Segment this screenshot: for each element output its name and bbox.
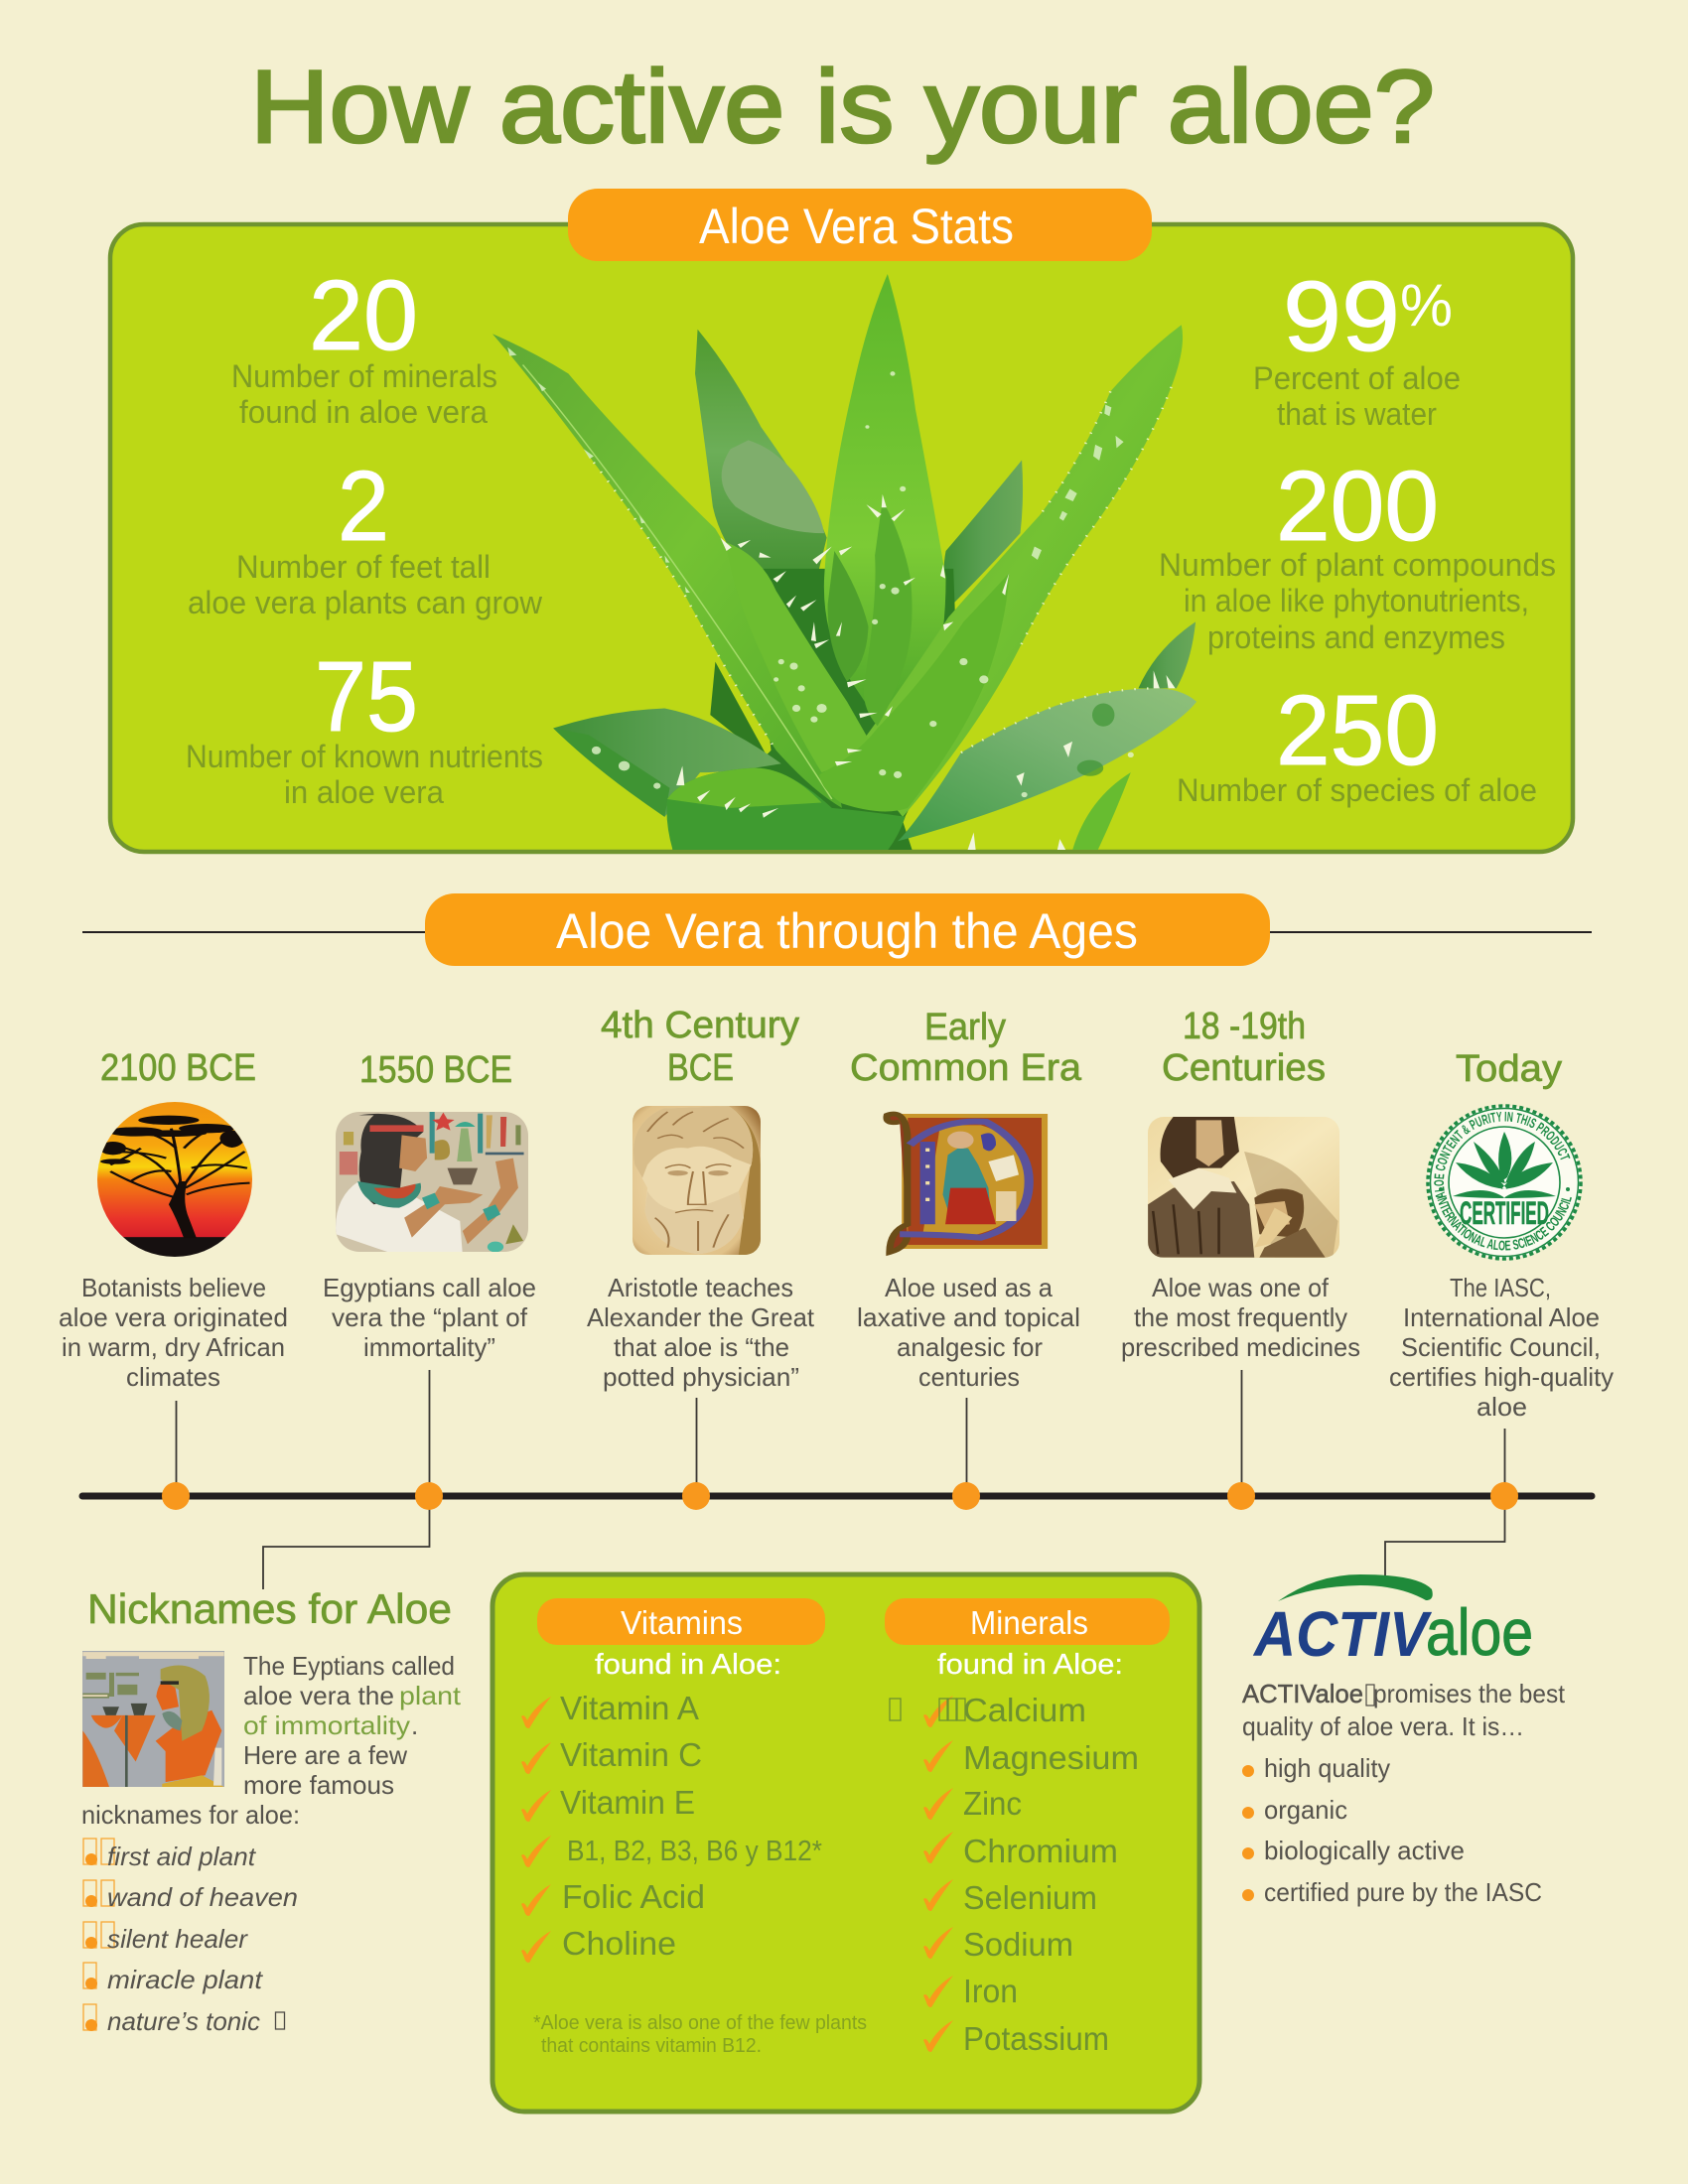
bullet list: certified pure by the IASC <box>1264 1877 1542 1907</box>
stat: 99% water <box>1253 261 1461 432</box>
intro text: of immortality <box>243 1710 410 1740</box>
nickname list: miracle plant <box>107 1965 264 1994</box>
stat: 75 nutrients <box>186 641 543 810</box>
heading: 2100 BCE: 2100 BCE <box>100 1047 256 1089</box>
icon: IASC certified seal: ALOE CONTENT & PURITY IN THIS PRODUCT <box>1434 1112 1571 1197</box>
icon: IASC certified seal <box>1426 1104 1583 1261</box>
era: 2100 BCE <box>59 1047 288 1392</box>
description <box>1121 1273 1360 1362</box>
missing glyph boxes <box>890 1699 965 1720</box>
stat: 99% water: that is water <box>1277 396 1437 432</box>
heading: 4th Century BCE <box>601 1005 799 1089</box>
description: Aloe used as a <box>885 1273 1054 1302</box>
nickname list: wand of heaven <box>107 1882 298 1912</box>
heading: Today: Today <box>1456 1048 1562 1090</box>
mineral list: Magnesium <box>963 1739 1139 1776</box>
intro text: more famous <box>243 1770 394 1800</box>
intro text <box>1242 1679 1566 1741</box>
description: aloe <box>1477 1392 1527 1422</box>
stat: 200 plant compounds: 200 <box>1276 451 1439 562</box>
stat: 99% water: % <box>1400 272 1453 339</box>
era: Early Common Era <box>850 1007 1082 1392</box>
stat: 2 feet tall: aloe vera plants can grow <box>188 585 543 620</box>
nickname bullet markers <box>83 1839 284 2031</box>
description: potted physician” <box>603 1362 799 1392</box>
stat: 20 minerals: found in aloe vera <box>239 394 488 430</box>
vitamin list: Vitamin A <box>560 1690 699 1726</box>
stat: 75 nutrients: Number of known nutrients <box>186 739 543 774</box>
intro text: . <box>411 1710 418 1740</box>
stat: 250 species: 250 <box>1276 675 1439 786</box>
stat: 20 minerals <box>231 260 497 430</box>
description: Alexander the Great <box>587 1302 815 1332</box>
description: Aloe was one of <box>1152 1273 1330 1302</box>
panel: ACTIValoe <box>1242 1574 1566 1907</box>
description <box>59 1273 288 1392</box>
stat: 200 plant compounds <box>1159 451 1556 655</box>
heading: Early Common Era <box>850 1007 1082 1089</box>
stat: 99% water: 99 <box>1283 261 1400 372</box>
column: vitamins <box>521 1598 867 2057</box>
footnote: that contains vitamin B12. <box>541 2035 762 2057</box>
title: How active is your aloe? <box>250 50 1435 165</box>
image: aloe vera plant <box>492 274 1196 857</box>
icon: IASC certified seal: CERTIFIED <box>1460 1195 1549 1231</box>
stat: 250 species <box>1177 675 1537 808</box>
description: that aloe is “the <box>614 1332 789 1362</box>
panel: aloe vera stats <box>110 189 1573 857</box>
stat: 250 species: Number of species of aloe <box>1177 772 1537 808</box>
era: Today <box>1389 1048 1614 1422</box>
description: vera the “plant of <box>332 1302 528 1332</box>
description: Scientific Council, <box>1401 1332 1601 1362</box>
filler <box>669 569 958 853</box>
timeline with connectors and dots <box>82 1370 1592 1589</box>
nickname list: first aid plant <box>107 1842 257 1871</box>
vitamin list: B1, B2, B3, B6 y B12* <box>567 1836 822 1867</box>
icon: IASC certified seal: INTERNATIONAL ALOE SCIENCE COUNCIL <box>1437 1195 1572 1251</box>
stat: 200 plant compounds: proteins and enzymes <box>1207 619 1505 655</box>
heading: 18-19th Centuries: 18 -19th <box>1183 1006 1306 1047</box>
heading: 18-19th Centuries: Centuries <box>1162 1047 1326 1089</box>
vitamin list: Choline <box>562 1925 676 1962</box>
image: Egyptian relief <box>336 1112 528 1254</box>
description: certifies high-quality <box>1389 1362 1614 1392</box>
check marks <box>923 1696 953 2052</box>
intro text <box>81 1651 462 1830</box>
intro text: aloe vera the <box>243 1681 394 1710</box>
logo: ACTIValoe: ACTIV <box>1252 1598 1433 1670</box>
intro text: promises the best <box>1373 1679 1566 1708</box>
image: acacia tree at sunset <box>97 1102 252 1257</box>
image: pharaoh wall painting <box>82 1651 224 1787</box>
stat: 2 feet tall: 2 <box>338 451 389 562</box>
description: Egyptians call aloe <box>323 1273 536 1302</box>
panel: vitamins and minerals <box>492 1574 1199 2112</box>
heading: 4th Century BCE: 4th Century <box>601 1005 799 1046</box>
heading: 4th Century BCE: BCE <box>667 1047 734 1089</box>
nickname list: nature’s tonic <box>107 2006 260 2036</box>
bullet list <box>1242 1753 1542 1907</box>
panel: nicknames for aloe <box>81 1585 462 2036</box>
mineral list: Zinc <box>963 1785 1022 1822</box>
nickname list <box>107 1842 298 2036</box>
section header: Aloe Vera through the Ages: Aloe Vera through the Ages <box>556 903 1138 959</box>
mineral list <box>963 1692 1139 2057</box>
stat: 2 feet tall <box>188 451 543 620</box>
subheading: found in Aloe: <box>595 1649 781 1681</box>
footnote: *Aloe vera is also one of the few plants <box>533 2012 867 2034</box>
heading pill: Aloe Vera Stats <box>568 189 1152 261</box>
column: minerals <box>885 1598 1170 2057</box>
description: in warm, dry African <box>62 1332 285 1362</box>
nickname list: silent healer <box>107 1924 248 1954</box>
description <box>1389 1273 1614 1422</box>
logo: ACTIValoe <box>1252 1574 1533 1670</box>
image: bust of Aristotle <box>633 1106 761 1255</box>
stat: 2 feet tall: Number of feet tall <box>236 549 491 585</box>
description: climates <box>126 1362 220 1392</box>
intro text: The Eyptians called <box>243 1651 455 1681</box>
description: immortality” <box>363 1332 495 1362</box>
image: illuminated letter D <box>887 1114 1045 1253</box>
description: The IASC, <box>1450 1273 1551 1302</box>
intro text: nicknames for aloe: <box>81 1800 300 1830</box>
stat: 75 nutrients: 75 <box>315 641 418 752</box>
stat: 200 plant compounds: in aloe like phytonutrients, <box>1184 583 1529 618</box>
mineral list: Iron <box>963 1973 1018 2009</box>
vitamin list: Vitamin E <box>560 1784 695 1821</box>
era: 18-19th Centuries <box>1121 1006 1360 1362</box>
mineral list: Potassium <box>963 2020 1109 2057</box>
vitamin list: Folic Acid <box>562 1878 705 1915</box>
intro text: ACTIValoe <box>1242 1679 1363 1708</box>
mineral list: Calcium <box>963 1692 1086 1728</box>
pill: Vitamins: Vitamins <box>621 1604 743 1641</box>
bullet list: biologically active <box>1264 1836 1465 1865</box>
vitamin list <box>560 1690 822 1962</box>
stat: 99% water: Percent of aloe <box>1253 360 1461 396</box>
logo: ACTIValoe: aloe <box>1426 1595 1533 1669</box>
description: Botanists believe <box>81 1273 266 1302</box>
check marks <box>521 1697 551 1963</box>
pill: Minerals <box>885 1598 1170 1645</box>
mineral list: Sodium <box>963 1926 1073 1963</box>
footnote <box>533 2012 867 2057</box>
heading pill: Aloe Vera Stats: Aloe Vera Stats <box>699 199 1014 254</box>
description: centuries <box>918 1362 1020 1392</box>
description: analgesic for <box>897 1332 1043 1362</box>
description <box>323 1273 536 1362</box>
bullet list: organic <box>1264 1795 1347 1825</box>
description: prescribed medicines <box>1121 1332 1360 1362</box>
bullet list: high quality <box>1264 1753 1390 1783</box>
stat: 200 plant compounds: Number of plant compounds <box>1159 547 1556 583</box>
pill: Minerals: Minerals <box>970 1604 1088 1641</box>
mineral list: Chromium <box>963 1833 1118 1869</box>
section header: Aloe Vera through the Ages <box>82 893 1592 966</box>
heading: 1550 BCE: 1550 BCE <box>359 1049 512 1091</box>
description: aloe vera originated <box>59 1302 288 1332</box>
heading: 18-19th Centuries <box>1162 1006 1326 1089</box>
vitamin list: Vitamin C <box>560 1736 702 1773</box>
heading: Nicknames for Aloe: Nicknames for Aloe <box>87 1585 452 1632</box>
description: International Aloe <box>1403 1302 1600 1332</box>
description: laxative and topical <box>857 1302 1080 1332</box>
subheading: found in Aloe: <box>937 1649 1123 1681</box>
stat: 20 minerals: 20 <box>309 260 418 371</box>
mineral list: Selenium <box>963 1879 1097 1916</box>
era: 1550 BCE <box>323 1049 536 1362</box>
stat: 75 nutrients: in aloe vera <box>284 774 444 810</box>
image: engraving of physician and boy <box>1148 1117 1339 1258</box>
era: 4th Century BCE <box>587 1005 815 1392</box>
heading: Early Common Era: Early <box>924 1007 1006 1048</box>
stat: 20 minerals: Number of minerals <box>231 358 497 394</box>
intro text: plant <box>399 1681 462 1710</box>
description: the most frequently <box>1134 1302 1347 1332</box>
heading: Early Common Era: Common Era <box>850 1047 1082 1089</box>
pill: Vitamins <box>537 1598 825 1645</box>
intro text: Here are a few <box>243 1740 407 1770</box>
description: Aristotle teaches <box>608 1273 793 1302</box>
intro text: quality of aloe vera. It is… <box>1242 1711 1524 1741</box>
description <box>587 1273 815 1392</box>
description <box>857 1273 1080 1392</box>
